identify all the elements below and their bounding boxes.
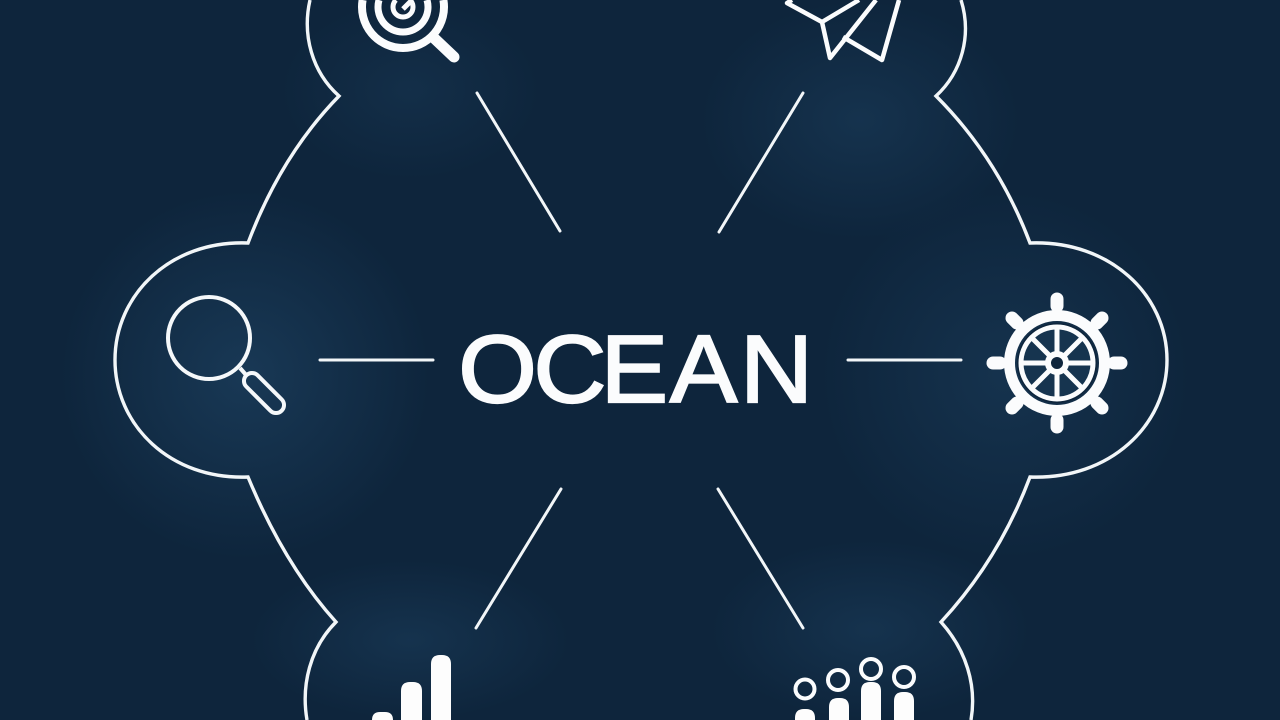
icon: magnifying glass — [168, 297, 287, 416]
icon: paper plane — [787, 0, 899, 60]
icon: target with magnifier — [362, 0, 454, 57]
connector lines — [320, 93, 961, 628]
title: OCEAN: OCEAN — [458, 315, 813, 422]
icon: people columns chart — [795, 659, 914, 720]
icon: ship wheel — [993, 299, 1121, 427]
icon: ascending bar chart — [372, 655, 451, 720]
